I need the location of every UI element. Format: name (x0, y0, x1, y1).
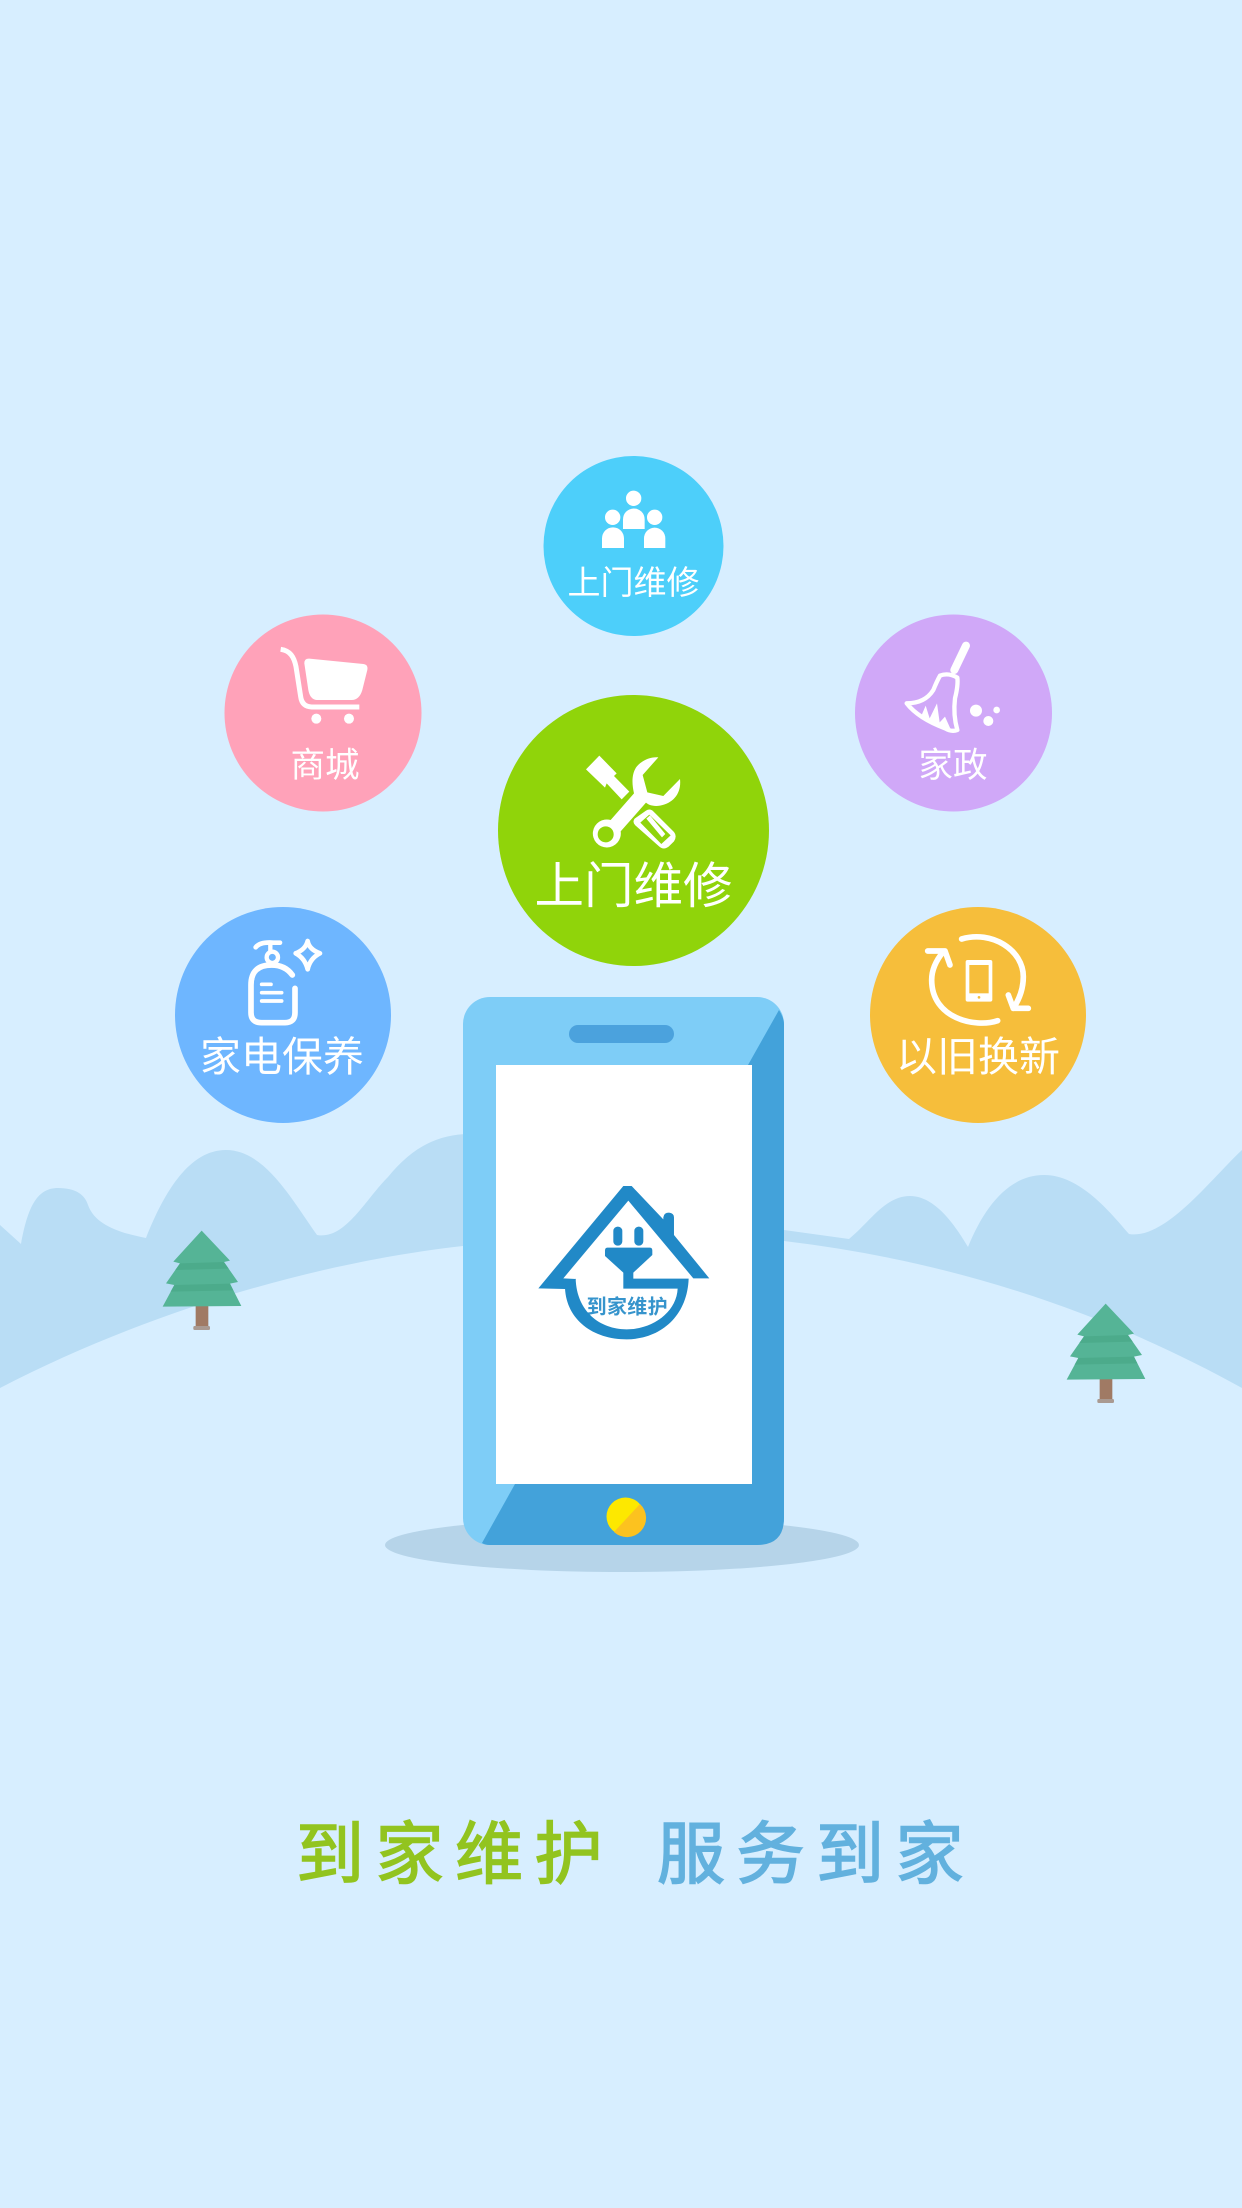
label: 以旧换新: 以旧换新 (896, 1034, 1060, 1080)
logo: 到家维护 house and plug: 到家维护 (587, 1294, 668, 1318)
icon: broom (907, 646, 1000, 731)
phone screen (496, 1065, 752, 1484)
tree right (1067, 1304, 1145, 1403)
circle: 上门维修 center (498, 695, 769, 966)
circle: 家电保养 (175, 907, 391, 1123)
circle: 以旧换新 (870, 907, 1086, 1123)
foreground hill (0, 1236, 1242, 1600)
icon: bottle with sparkle (251, 941, 320, 1023)
label: 上门维修: 上门维修 (568, 564, 700, 601)
circle: 上门维修 top (544, 456, 724, 636)
label: 家政: 家政 (918, 747, 988, 785)
label: 上门维修: 上门维修 (534, 859, 732, 914)
icon: people (602, 491, 665, 548)
tree left (163, 1231, 241, 1330)
circle: 商城 (224, 614, 422, 812)
label: 商城: 商城 (290, 747, 360, 785)
phone (463, 997, 784, 1545)
slogan: 到家维护: 到家维护 (296, 1817, 614, 1893)
circle: 家政 (855, 614, 1052, 812)
icon: shopping cart (281, 649, 367, 724)
icon: phone swap (928, 937, 1028, 1023)
logo: 到家维护 house and plug (538, 1186, 709, 1339)
phone home button (606, 1498, 646, 1537)
slogan: 服务到家: 服务到家 (657, 1817, 975, 1893)
phone speaker (569, 1025, 674, 1043)
background mountains (0, 1134, 1242, 1400)
phone shadow (385, 1518, 859, 1572)
label: 家电保养: 家电保养 (200, 1034, 364, 1080)
icon: wrench and screwdriver (586, 756, 680, 849)
